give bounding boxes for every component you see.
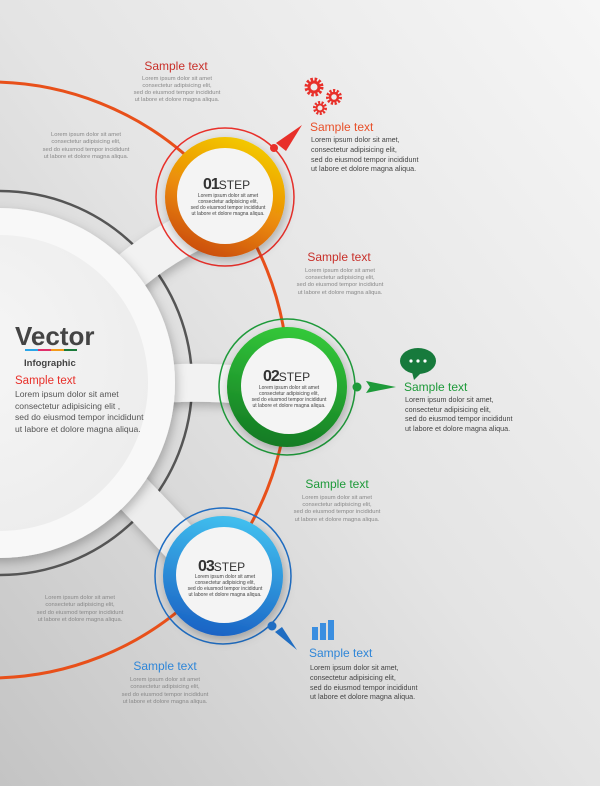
text: left small 1: consectetur adipisicing elit,	[51, 139, 121, 145]
step 1: consectetur adipisicing elit,	[198, 199, 258, 205]
text: bottom blue: ut labore et dolore magna aliqua.	[123, 699, 208, 705]
title block	[15, 321, 144, 434]
title block: Lorem ipsum dolor sit amet	[15, 389, 119, 399]
title block: ut labore et dolore magna aliqua.	[15, 424, 141, 434]
text: green small: sed do eiusmod tempor incididunt	[294, 509, 381, 515]
step 1: ut labore et dolore magna aliqua.	[191, 211, 265, 217]
step 1: sed do eiusmod tempor incididunt	[191, 205, 266, 211]
text: mid-right red: ut labore et dolore magna aliqua.	[298, 290, 383, 296]
text: chat: Lorem ipsum dolor sit amet,	[405, 395, 494, 404]
title block: Infographic	[24, 358, 76, 369]
text: gears: ut labore et dolore magna aliqua.	[311, 164, 416, 173]
text: chat: sed do eiusmod tempor incididunt	[405, 414, 512, 423]
icon: gears	[307, 80, 340, 113]
step 3: ut labore et dolore magna aliqua.	[188, 592, 262, 598]
arrow red	[270, 125, 302, 152]
text: left small 1: Lorem ipsum dolor sit amet	[51, 132, 121, 138]
text: top: Lorem ipsum dolor sit amet	[142, 76, 212, 82]
text: bottom blue: Lorem ipsum dolor sit amet	[130, 677, 200, 683]
text: left small 2: Lorem ipsum dolor sit amet	[45, 595, 115, 601]
title block: Sample text	[15, 375, 77, 387]
text: top	[134, 59, 221, 103]
text: gears: sed do eiusmod tempor incididunt	[311, 155, 418, 164]
text: left small 2: sed do eiusmod tempor incididunt	[37, 610, 124, 616]
text: bars: Sample text	[309, 646, 373, 660]
text: left small 1: sed do eiusmod tempor incididunt	[43, 147, 130, 153]
step 3: 03STEP	[198, 558, 245, 575]
text: chat: consectetur adipisicing elit,	[405, 405, 491, 414]
connectors	[110, 225, 255, 565]
step 3	[155, 508, 291, 644]
step 1: 01STEP	[203, 176, 250, 193]
text: green small: ut labore et dolore magna aliqua.	[295, 517, 380, 523]
text: green small	[294, 477, 381, 523]
text: green small: Sample text	[305, 477, 369, 491]
step 2	[219, 319, 355, 455]
text: mid-right red: consectetur adipisicing elit,	[305, 275, 375, 281]
text: left small 2: ut labore et dolore magna aliqua.	[38, 617, 123, 623]
text: gears: Lorem ipsum dolor sit amet,	[311, 135, 400, 144]
text: chat: Sample text	[404, 380, 468, 394]
orange arc	[0, 82, 288, 678]
icon: bar chart	[312, 620, 334, 640]
text: left small 1: ut labore et dolore magna aliqua.	[44, 154, 129, 160]
text: bottom blue: consectetur adipisicing elit,	[130, 684, 200, 690]
text: gears	[310, 120, 418, 173]
text: left small 1	[43, 132, 130, 160]
text: left small 2	[37, 595, 124, 623]
gray ring line	[0, 191, 192, 575]
text: bars: Lorem ipsum dolor sit amet,	[310, 663, 399, 672]
text: mid-right red	[297, 250, 384, 296]
text: bottom blue: Sample text	[133, 659, 197, 673]
text: bars: ut labore et dolore magna aliqua.	[310, 692, 415, 701]
text: gears: Sample text	[310, 120, 374, 134]
text: mid-right red: Sample text	[307, 250, 371, 264]
arrow blue	[268, 622, 297, 650]
icon: chat bubble	[400, 348, 436, 380]
text: green small: consectetur adipisicing elit,	[302, 502, 372, 508]
text: top: Sample text	[144, 59, 208, 73]
step 3: Lorem ipsum dolor sit amet	[195, 574, 256, 580]
text: gears: consectetur adipisicing elit,	[311, 145, 397, 154]
step 2: ut labore et dolore magna aliqua.	[252, 403, 326, 409]
text: top: ut labore et dolore magna aliqua.	[135, 97, 220, 103]
title block: sed do eiusmod tempor incididunt	[15, 412, 144, 422]
step 1: Lorem ipsum dolor sit amet	[198, 193, 259, 199]
step 3: sed do eiusmod tempor incididunt	[188, 586, 263, 592]
text: green small: Lorem ipsum dolor sit amet	[302, 495, 372, 501]
text: top: consectetur adipisicing elit,	[142, 83, 212, 89]
step 1	[156, 128, 294, 266]
arrow green	[352, 381, 396, 393]
text: bars: sed do eiusmod tempor incididunt	[310, 683, 417, 692]
text: top: sed do eiusmod tempor incididunt	[134, 90, 221, 96]
title block: consectetur adipisicing elit ,	[15, 401, 120, 411]
text: chat: ut labore et dolore magna aliqua.	[405, 424, 510, 433]
main disc	[0, 208, 175, 558]
text: left small 2: consectetur adipisicing elit,	[45, 602, 115, 608]
text: mid-right red: sed do eiusmod tempor incididunt	[297, 282, 384, 288]
step 2: sed do eiusmod tempor incididunt	[252, 397, 327, 403]
title block: Vector	[15, 321, 94, 351]
text: bars: consectetur adipisicing elit,	[310, 673, 396, 682]
step 2: consectetur adipisicing elit,	[259, 391, 319, 397]
text: bars	[309, 646, 417, 701]
text: chat	[404, 380, 512, 433]
step 3: consectetur adipisicing elit,	[195, 580, 255, 586]
step 2: Lorem ipsum dolor sit amet	[259, 385, 320, 391]
text: bottom blue	[122, 659, 209, 705]
text: mid-right red: Lorem ipsum dolor sit amet	[305, 268, 375, 274]
text: bottom blue: sed do eiusmod tempor incididunt	[122, 692, 209, 698]
step 2: 02STEP	[263, 368, 310, 385]
